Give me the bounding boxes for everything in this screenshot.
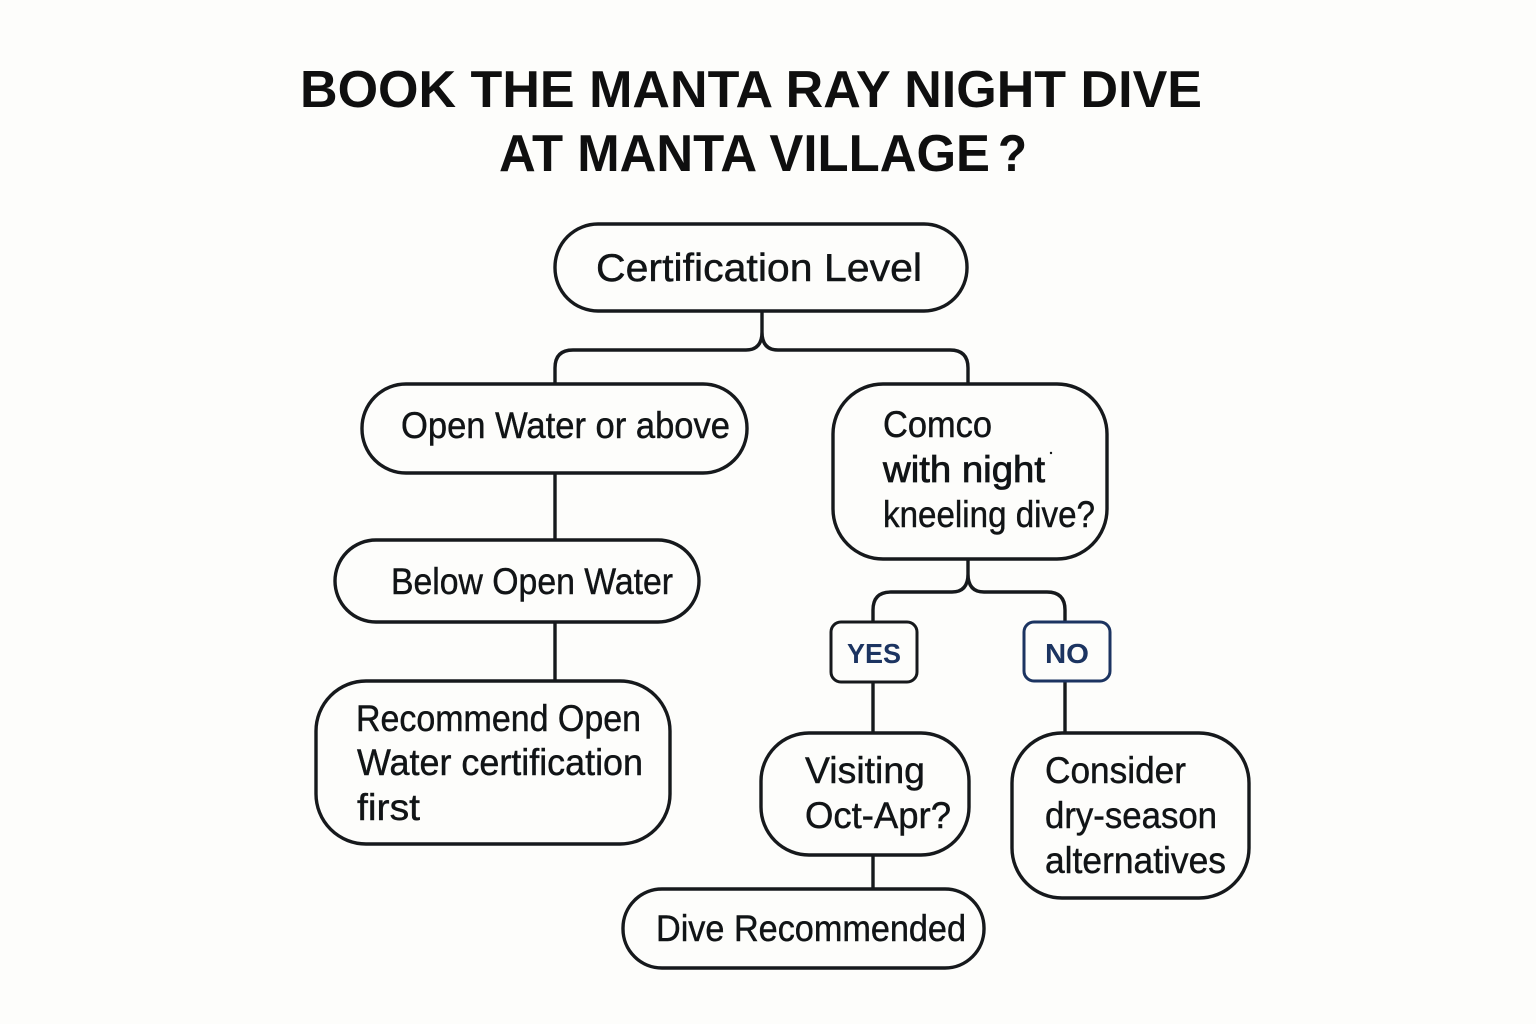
node: certification level: Certification Level [596, 247, 922, 290]
connector: certification to branches [555, 311, 968, 384]
node: consider dry-season alternatives: dry-season [1045, 795, 1217, 836]
node: consider dry-season alternatives [1012, 733, 1249, 898]
node: recommend open water certification [316, 681, 670, 844]
connector: comfort to yes and no [873, 559, 1065, 622]
node: consider dry-season alternatives: alternatives [1045, 840, 1226, 881]
tag: no: NO [1045, 638, 1089, 669]
node: dive recommended: Dive Recommended [656, 908, 966, 949]
node: recommend open water certification: Water certification [357, 742, 643, 783]
node: below open water: Below Open Water [391, 561, 673, 602]
title [300, 61, 1202, 183]
node: comfort question: with night [882, 449, 1046, 490]
node: recommend open water certification: first [357, 787, 421, 828]
tag: yes [831, 622, 917, 682]
title: BOOK THE MANTA RAY NIGHT DIVE [300, 61, 1202, 119]
node: visiting october to april [761, 733, 969, 855]
node: certification level [555, 224, 967, 311]
node: consider dry-season alternatives: Consider [1045, 750, 1186, 791]
tag: yes: YES [847, 638, 901, 669]
title: AT MANTA VILLAGE [499, 125, 990, 183]
node: visiting october to april: Oct-Apr? [805, 795, 951, 836]
connector: left column [553, 473, 557, 681]
node: recommend open water certification: Recommend Open [356, 698, 641, 739]
node: comfort question [833, 384, 1107, 559]
node: open water or above: Open Water or above [401, 405, 730, 446]
connector: right column [873, 682, 1065, 889]
node: dive recommended [623, 889, 984, 968]
node: below open water [335, 540, 699, 622]
title: ? [998, 125, 1027, 183]
tag: no [1024, 622, 1110, 681]
node: visiting october to april: Visiting [805, 750, 925, 791]
node: comfort question: Comco [883, 404, 992, 445]
node: open water or above [362, 384, 747, 473]
node: comfort question: kneeling dive? [883, 494, 1095, 535]
